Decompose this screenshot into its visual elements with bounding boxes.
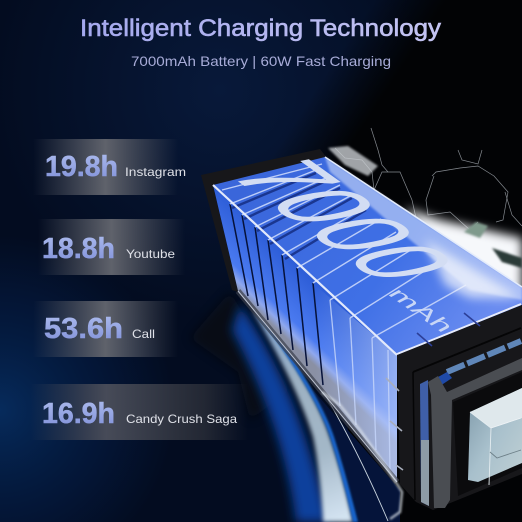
- stat: Instagram: 19.8h: [45, 151, 118, 183]
- black end cap: [201, 149, 327, 292]
- stat: Instagram: Instagram: [125, 165, 186, 179]
- stat: Youtube: 18.8h: [42, 233, 115, 265]
- dark gap right of the rim: [300, 375, 400, 522]
- stat: Youtube: [38, 219, 185, 275]
- stat: Call: 53.6h: [44, 313, 123, 345]
- 7000 capacity label: 7000: [201, 152, 487, 289]
- pale band: [252, 310, 353, 522]
- far edge highlight: [325, 157, 522, 287]
- battery: [201, 149, 522, 519]
- column seams: [413, 372, 415, 500]
- title: Intelligent Charging Technology: [80, 15, 441, 42]
- stat: Call: [33, 301, 178, 357]
- metal frame: [428, 358, 522, 508]
- thin white arc: [327, 398, 388, 521]
- blue circuit strip: [447, 341, 521, 372]
- stat: Instagram: [33, 139, 186, 195]
- front face: [386, 304, 522, 510]
- vertical circuit strip: [420, 380, 429, 506]
- stat: Youtube: Youtube: [126, 247, 175, 261]
- white ribs: [222, 164, 466, 338]
- top face: [213, 157, 522, 355]
- blue line: [262, 317, 358, 522]
- glass window: [468, 388, 522, 482]
- side face: [213, 185, 397, 482]
- subtitle: 7000mAh Battery | 60W Fast Charging: [131, 53, 391, 69]
- stat: Call: Call: [132, 327, 155, 341]
- near edge highlight: [213, 185, 397, 355]
- glass far band: [325, 157, 522, 300]
- white glow at far end: [425, 240, 520, 298]
- white top edge: [397, 304, 521, 354]
- stat: Candy Crush Saga: Candy Crush Saga: [126, 412, 237, 426]
- lightning bolts: [335, 128, 522, 230]
- lightning glow: [328, 146, 522, 296]
- dark inner frame: [453, 372, 522, 496]
- dark rib shadows: [232, 173, 366, 259]
- glass foot steps: [238, 291, 397, 482]
- stat: Candy Crush Saga: 16.9h: [42, 398, 115, 430]
- stat: Candy Crush Saga: [30, 384, 248, 440]
- sparks along the lower edge: [322, 392, 402, 519]
- glass box top: [470, 388, 522, 428]
- planet arc rim: [232, 305, 400, 522]
- mAh label: mAh: [383, 285, 460, 335]
- pins: [417, 313, 480, 346]
- blue rim glow: [232, 305, 328, 522]
